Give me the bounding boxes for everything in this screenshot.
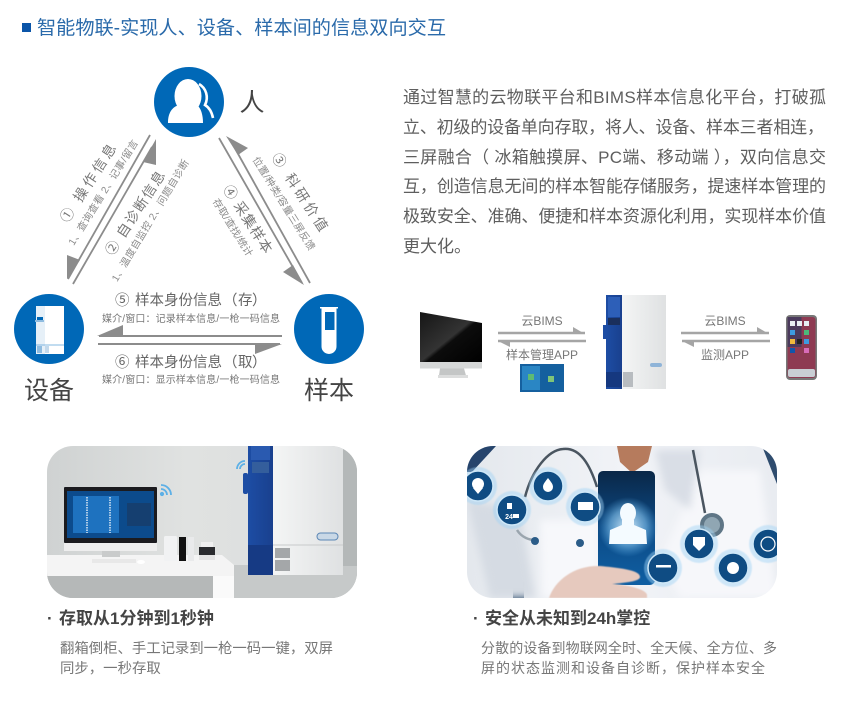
text: step 5: ） (252, 292, 266, 309)
text: step 3 detail: 位置/种类/容量三屏反馈 (250, 154, 318, 253)
large freezer (243, 446, 357, 575)
hand (549, 566, 647, 598)
arrow pair right (681, 327, 770, 347)
intro paragraph: 通过智慧的云物联平台和BIMS样本信息化平台，打破孤 (403, 88, 826, 107)
bubble glyphs (472, 478, 775, 574)
icon: freezer (603, 295, 666, 389)
text: step 6: ⑥ (115, 354, 130, 371)
label: device: 设备 (24, 377, 74, 405)
text: step 2 detail: 1、温度自监控 2、问题自诊断 (109, 157, 192, 284)
stethoscope (517, 449, 722, 547)
intro paragraph (403, 88, 826, 256)
description: 同步，一秒存取 (60, 660, 161, 677)
triangle diagram (14, 67, 364, 405)
bubble halo (459, 467, 787, 587)
text: step 5: 存 (238, 292, 252, 309)
arrow pair left (498, 327, 586, 347)
text: bubble 24h: 24 (505, 514, 513, 521)
label: cloud BIMS left: 云BIMS (521, 314, 563, 328)
node: person (154, 67, 224, 137)
heading: 安全从未知到24h掌控 (485, 608, 650, 628)
node: device (14, 294, 84, 364)
text: step 6: （ (223, 354, 238, 371)
arrow: person to sample (219, 138, 304, 285)
medical icon bubbles (463, 471, 783, 583)
text: step 1 detail: 1、查询查看 2、记事/留言 (65, 137, 141, 248)
intro paragraph: 互，创造信息无间的样本智能存储服务，提速样本管理的 (403, 177, 826, 196)
text: step 5 detail: 媒介/窗口：记录样本信息/一枪一码信息 (102, 312, 280, 325)
description: 分散的设备到物联网全时、全天候、全方位、多 (481, 640, 777, 656)
devices on desk (164, 536, 215, 561)
label: cloud BIMS right: 云BIMS (704, 314, 746, 328)
text: step 6: ） (252, 354, 266, 371)
icon: smartphone (786, 315, 817, 380)
label: sample app: 样本管理APP (506, 347, 578, 362)
intro paragraph: 立、初级的设备单向存取，将人、设备、样本三者相连， (403, 118, 824, 137)
background corners (467, 446, 496, 472)
text: step 5: ⑤ (115, 292, 130, 309)
icon: wifi signals (161, 461, 245, 495)
text: step 4 detail: 存取/查找/统计 (210, 196, 256, 259)
description: 翻箱倒柜、手工记录到一枪一码一键，双屏 (60, 640, 333, 657)
feature: safety monitoring (473, 608, 777, 676)
text: step 3: ③ 科研价值 (269, 150, 331, 234)
title: 智能物联-实现人、设备、样本间的信息双向交互 (37, 17, 446, 39)
description (60, 640, 333, 677)
photo: doctor holding phone (459, 446, 787, 598)
desk (47, 555, 234, 598)
text: step 1: ① 操作信息 (57, 141, 119, 225)
heading: 存取从1分钟到1秒钟 (59, 608, 214, 628)
flow diagram: monitor, freezer, phone (420, 295, 817, 392)
heading: · (473, 609, 479, 628)
text: step 6: 样本身份信息 (135, 354, 222, 371)
text: step 4: ④ 采集样本 (220, 182, 276, 256)
label: sample: 样本 (304, 377, 354, 405)
intro paragraph: 更大化。 (403, 237, 471, 256)
feature: storage speed (47, 608, 333, 677)
neck (617, 446, 652, 473)
icon: tablet app (520, 364, 564, 392)
description (481, 640, 777, 676)
monitor with software (64, 487, 157, 564)
text: step 2: ② 自诊断信息 (102, 168, 168, 258)
text: step 5: （ (223, 292, 238, 309)
photo: lab with freezer and monitor (47, 446, 357, 598)
arrow: person to device (67, 135, 150, 279)
text: step 6: 取 (238, 355, 253, 371)
text: step 6 detail: 媒介/窗口：显示样本信息/一枪一码信息 (102, 373, 280, 386)
coat shading (467, 450, 777, 598)
intro paragraph: 三屏融合（ 冰箱触摸屏、PC端、移动端 ），双向信息交 (403, 148, 826, 167)
node: sample (294, 294, 364, 364)
description: 屏的状态监测和设备自诊断，保护样本安全 (481, 660, 765, 676)
arrow: device to person (73, 139, 156, 284)
arrow: device to sample (98, 344, 282, 354)
label: person: 人 (239, 89, 265, 117)
icon: monitor (420, 312, 482, 378)
arrow: sample to person (226, 136, 310, 283)
phone (598, 471, 658, 585)
intro paragraph: 极致安全、准确、便捷和样本资源化利用，实现样本价值 (403, 207, 826, 226)
arrow: sample to device (97, 325, 282, 336)
heading: · (47, 609, 53, 628)
text: step 5: 样本身份信息 (135, 292, 222, 309)
label: monitor app: 监测APP (701, 348, 749, 362)
